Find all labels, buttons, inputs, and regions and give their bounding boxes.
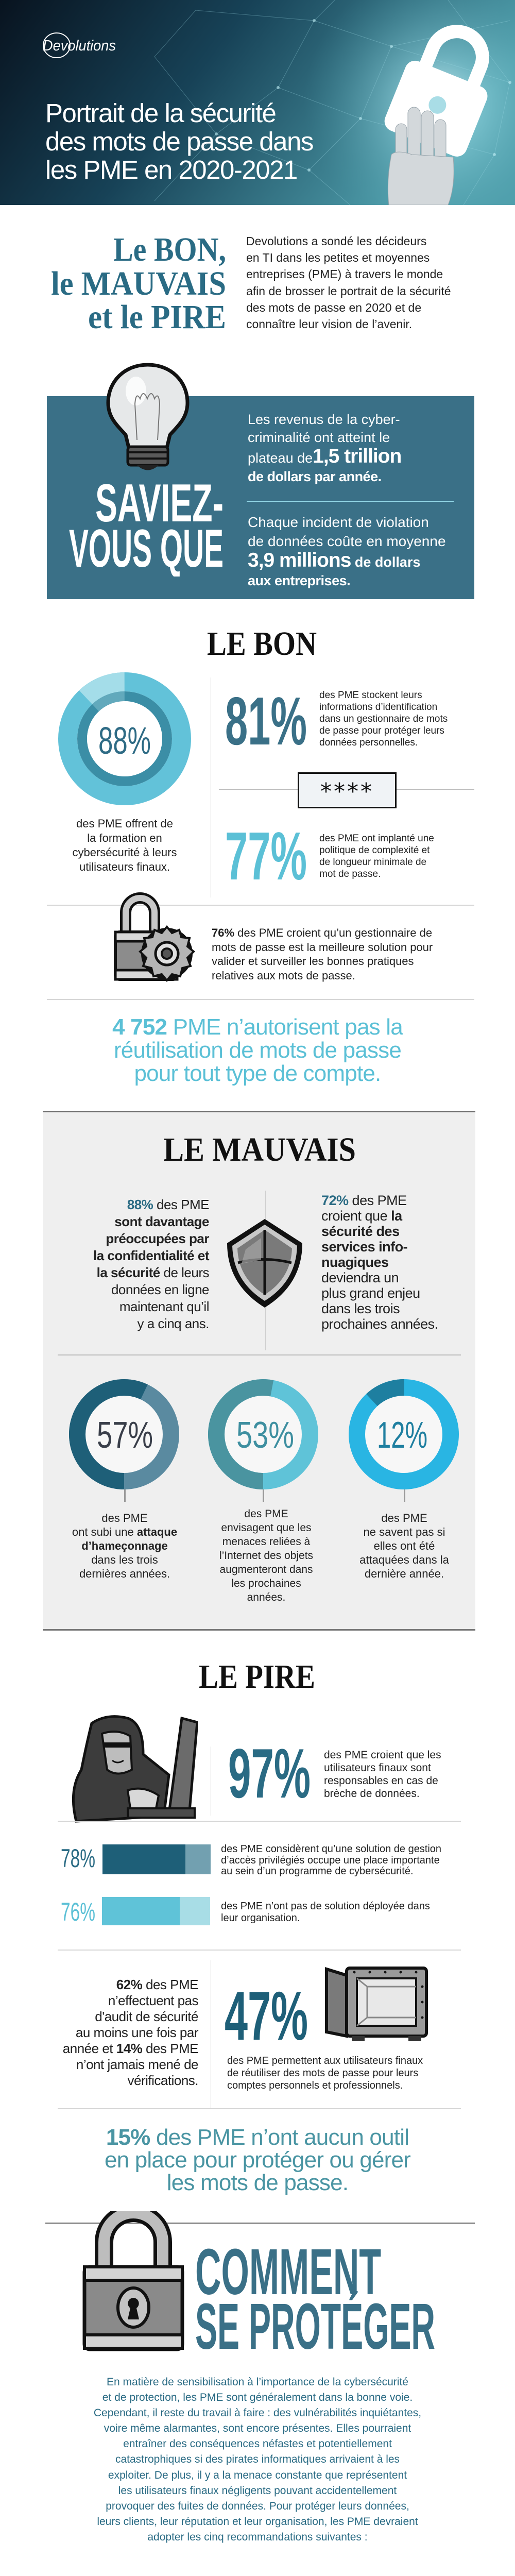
fact: cybercrime revenue: Les revenus de la cyber- <box>248 412 400 427</box>
text: 88% privacy concern: maintenant qu’il <box>119 1299 209 1314</box>
chart: donut 12%: 12% <box>377 1415 427 1456</box>
text: 47% caption: de réutiliser des mots de passe pour leurs <box>227 2067 418 2079</box>
logo: Devolutions <box>43 32 116 58</box>
text: 97% caption: utilisateurs finaux sont <box>324 1762 431 1774</box>
text: 78% caption: au sein d’un programme de cybersécurité. <box>221 1866 414 1877</box>
intro text: en TI dans les petites et moyennes <box>246 251 430 264</box>
text: protection intro paragraph: catastrophiques si des pirates informatiques arrivaient à les <box>115 2453 400 2465</box>
text: 72% cloud security: prochaines années. <box>321 1316 438 1332</box>
callout: 4 752 PME: réutilisation de mots de passe <box>114 1038 401 1063</box>
text: 97% caption: des PME croient que les <box>324 1749 441 1761</box>
text: 53% caption: envisagent que les <box>221 1522 312 1534</box>
text: 47% caption: des PME permettent aux utilisateurs finaux <box>227 2055 423 2066</box>
fact: data breach cost <box>248 514 446 588</box>
text: 88% privacy concern: la confidentialité et <box>93 1248 209 1263</box>
text: protection intro paragraph: exploiter. De plus, il y a la menace constante que représentent <box>108 2469 407 2481</box>
callout: 15% des PME: 15% des PME n’ont aucun outil <box>106 2125 409 2150</box>
heading: SAVIEZ-VOUS QUE <box>69 479 224 577</box>
text: 76% fact <box>212 926 433 982</box>
text: 12% caption: des PME <box>381 1512 427 1524</box>
text: 53% caption: des PME <box>244 1508 288 1520</box>
heading: COMMENT SE PROTÉGER <box>193 2236 438 2352</box>
icon: hacker at laptop <box>72 1715 198 1823</box>
text: 81% caption: données personnelles. <box>319 737 418 748</box>
icon: padlock with gear <box>114 892 195 982</box>
text: 57% caption: dernières années. <box>79 1567 170 1580</box>
callout: 15% des PME: en place pour protéger ou gérer <box>105 2147 410 2173</box>
text: 77% caption: des PME ont implanté une <box>319 833 434 844</box>
fact: cybercrime revenue: plateau de1,5 trillion <box>248 445 401 467</box>
text: 88% privacy concern: 88% des PME <box>127 1197 209 1212</box>
text: 53% caption: menaces reliées à <box>222 1536 310 1548</box>
text: 72% cloud security: nuagiques <box>321 1255 389 1270</box>
text: protection intro paragraph: provoquer des fuites de données. Pour protéger leurs données, <box>106 2500 409 2512</box>
text: 72% cloud security: plus grand enjeu <box>321 1285 420 1301</box>
text: 57% caption: ont subi une attaque <box>72 1526 177 1538</box>
fact: cybercrime revenue <box>248 412 401 484</box>
text: 47% caption <box>227 2055 423 2092</box>
text: 97% caption <box>324 1749 441 1800</box>
text: 88% privacy concern <box>93 1197 209 1331</box>
text: 57% caption: des PME <box>101 1512 148 1524</box>
text: protection intro paragraph: leurs clients, leur réputation et leur organisation, les PME devraient <box>97 2516 418 2528</box>
text: 53% caption: années. <box>247 1591 285 1603</box>
callout: 4 752 PME: pour tout type de compte. <box>134 1061 381 1086</box>
title: des mots de passe dans <box>45 127 313 156</box>
text: protection intro paragraph: les utilisateurs finaux négligents pouvant accidentellement <box>118 2485 397 2497</box>
callout: 4 752 PME <box>112 1014 403 1086</box>
intro text: afin de brosser le portrait de la sécurité <box>246 284 451 298</box>
text: 72% cloud security: 72% des PME <box>321 1193 407 1208</box>
text: 81% caption: de passe pour protéger leurs <box>319 725 444 736</box>
icon: hand <box>388 107 454 205</box>
text: 72% cloud security: dans les trois <box>321 1301 400 1316</box>
text: 76% caption: des PME n’ont pas de solution déployée dans <box>221 1901 430 1912</box>
text: 62% audit: année et 14% des PME <box>63 2041 198 2056</box>
text: 81% caption <box>319 690 448 748</box>
text: 77% caption: de longueur minimale de <box>319 857 426 868</box>
text: 12% caption: elles ont été <box>374 1539 435 1552</box>
text: 81% caption: des PME stockent leurs <box>319 690 422 701</box>
intro text: entreprises (PME) à travers le monde <box>246 267 443 281</box>
text: protection intro paragraph: adopter les cinq recommandations suivantes : <box>147 2531 368 2543</box>
text: 77% caption: mot de passe. <box>319 869 381 879</box>
text: 12% caption: attaquées dans la <box>359 1553 449 1566</box>
text: 12% caption: ne savent pas si <box>364 1526 445 1538</box>
intro text: connaître leur vision de l’avenir. <box>246 317 412 331</box>
text: 57% caption: dans les trois <box>91 1553 158 1566</box>
text: protection intro paragraph: et de protection, les PME sont généralement dans la bonne voie. <box>102 2392 413 2403</box>
fact: data breach cost: Chaque incident de violation <box>248 514 429 530</box>
chart: donut 88%: 88% <box>98 719 151 762</box>
text: protection intro paragraph: voire même alarmantes, sont encore présentes. Elles pourraient <box>104 2422 411 2434</box>
text: 76% caption: leur organisation. <box>221 1912 300 1924</box>
icon: password field: **** <box>320 778 374 805</box>
text: 88% privacy concern: sont davantage <box>114 1214 209 1229</box>
icon: padlock <box>80 2211 186 2351</box>
text: 47% caption: comptes personnels et professionnels. <box>227 2080 403 2091</box>
text: 12% caption <box>359 1512 449 1580</box>
text: 62% audit: n’ont jamais mené de <box>76 2057 198 2072</box>
text: protection intro paragraph: entraîner des conséquences néfastes et potentiellement <box>123 2438 392 2450</box>
callout: 15% des PME: les mots de passe. <box>167 2170 348 2195</box>
text: 77% caption: politique de complexité et <box>319 845 430 856</box>
text: 72% cloud security: services info- <box>321 1239 407 1255</box>
text: 72% cloud security: deviendra un <box>321 1270 399 1285</box>
chart: donut 53%: 53% <box>236 1415 294 1456</box>
title: Portrait de la sécurité <box>45 98 276 128</box>
text: 88% privacy concern: y a cinq ans. <box>138 1316 209 1331</box>
text: 57% caption: d’hameçonnage <box>81 1539 168 1552</box>
title <box>45 98 313 184</box>
text: 53% caption: augmenteront dans <box>220 1564 313 1575</box>
bar: 78% <box>61 1844 211 1874</box>
text: 78% caption: d’accès privilégiés occupe une place importante <box>221 1855 440 1866</box>
text: 53% caption: les prochaines <box>231 1578 301 1589</box>
chart: donut 57%: 57% <box>97 1415 153 1456</box>
bar: 76% <box>61 1897 210 1926</box>
text: protection intro paragraph <box>31 2375 484 2545</box>
text: 88% caption: cybersécurité à leurs <box>72 846 177 859</box>
fact: data breach cost: de données coûte en moyenne <box>248 533 446 549</box>
text: 81% caption: dans un gestionnaire de mots <box>319 714 448 724</box>
text: 88% caption <box>72 817 177 873</box>
icon: shield <box>227 1219 302 1308</box>
text: 72% cloud security: croient que la <box>321 1208 402 1224</box>
intro text: des mots de passe en 2020 et de <box>246 301 421 314</box>
callout: 15% des PME <box>52 2126 464 2194</box>
text: 88% caption: utilisateurs finaux. <box>79 860 170 873</box>
icon: open safe <box>325 1967 428 2041</box>
text: 77% caption <box>319 833 434 879</box>
text: 72% cloud security: sécurité des <box>321 1224 400 1239</box>
intro text: Devolutions a sondé les décideurs <box>246 234 426 248</box>
icon: password field <box>298 772 397 808</box>
text: 81% caption: informations d’identification <box>319 702 437 713</box>
heading: Le BON, le MAUVAIS et le PIRE <box>51 232 226 335</box>
text: 76% fact: valider et surveiller les bonnes pratiques <box>212 955 414 968</box>
text: 76% fact: relatives aux mots de passe. <box>212 969 355 982</box>
logo: Devolutions: Devolutions <box>43 38 116 54</box>
chart: donut 88% <box>58 672 191 805</box>
text: 53% caption <box>219 1508 313 1603</box>
fact: cybercrime revenue: de dollars par année. <box>248 469 382 484</box>
panel: saviez-vous que <box>47 396 474 599</box>
text: 62% audit <box>63 1977 199 2088</box>
text: 78% caption <box>221 1843 441 1877</box>
text: 72% cloud security <box>321 1193 438 1332</box>
text: 62% audit: 62% des PME <box>116 1977 198 1992</box>
text: protection intro paragraph: En matière de sensibilisation à l’importance de la cybersécurité <box>107 2376 408 2388</box>
title: les PME en 2020-2021 <box>45 155 297 184</box>
fact: data breach cost: aux entreprises. <box>248 573 350 588</box>
bar: 76%: 76% <box>61 1897 95 1926</box>
text: 12% caption: dernière année. <box>365 1567 444 1580</box>
text: 62% audit: au moins une fois par <box>76 2025 198 2040</box>
fact: cybercrime revenue: criminalité ont atteint le <box>248 430 390 445</box>
text: 97% caption: brèche de données. <box>324 1788 420 1800</box>
text: 62% audit: n’effectuent pas <box>108 1993 198 2008</box>
text: 88% privacy concern: préoccupées par <box>106 1231 209 1246</box>
header banner <box>0 0 515 205</box>
chart: donut 12% <box>349 1379 459 1489</box>
bar: 78%: 78% <box>61 1844 95 1873</box>
text: protection intro paragraph: Cependant, il reste du travail à faire : des vulnérabilités inquiétantes, <box>94 2407 421 2419</box>
fact: data breach cost: 3,9 millions de dollars <box>248 549 420 571</box>
text: 76% fact: 76% des PME croient qu’un gestionnaire de <box>212 926 432 939</box>
icon: light bulb <box>106 363 190 470</box>
panel: le mauvais <box>43 1111 475 1631</box>
text: 78% caption: des PME considèrent qu’une solution de gestion <box>221 1843 441 1855</box>
chart: donut 53% <box>208 1379 318 1489</box>
text: 88% caption: des PME offrent de <box>76 817 173 830</box>
text: 62% audit: vérifications. <box>128 2073 198 2088</box>
chart: donut 57% <box>69 1379 179 1489</box>
divider line <box>247 501 454 502</box>
text: 97% caption: responsables en cas de <box>324 1775 438 1787</box>
text: 76% caption <box>221 1901 430 1924</box>
text: 88% privacy concern: la sécurité de leurs <box>97 1265 209 1280</box>
text: 76% fact: mots de passe est la meilleure solution pour <box>212 941 433 954</box>
text: 62% audit: d'audit de sécurité <box>95 2009 198 2024</box>
text: 88% privacy concern: données en ligne <box>111 1282 209 1297</box>
callout: 4 752 PME: 4 752 PME n’autorisent pas la <box>112 1014 403 1040</box>
intro text <box>246 234 451 331</box>
text: 57% caption <box>72 1512 177 1580</box>
text: 88% caption: la formation en <box>87 832 162 844</box>
icon: glowing padlock <box>382 17 507 160</box>
text: 53% caption: l’Internet des objets <box>219 1550 313 1562</box>
